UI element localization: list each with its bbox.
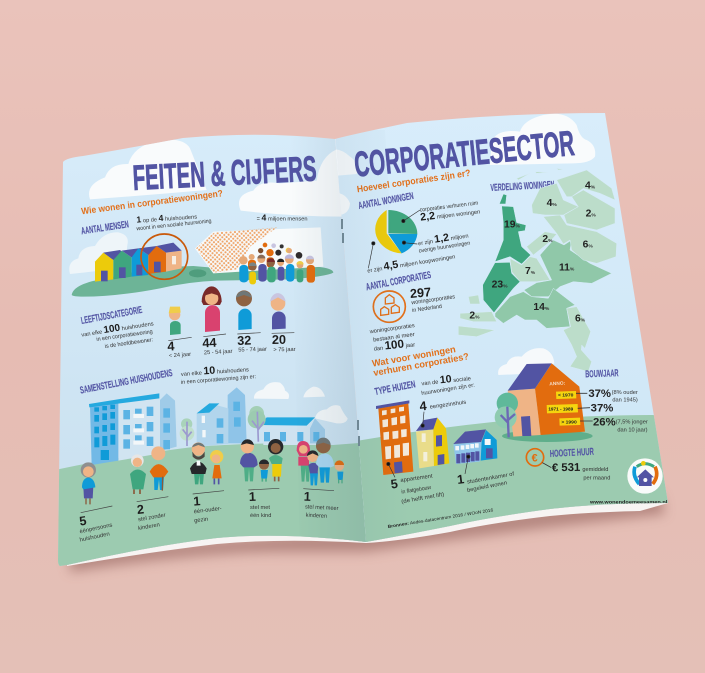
age stat: over 75: 20 (272, 333, 286, 347)
household: single parent: één-ouder- (194, 506, 222, 515)
icon: euro coin: € (532, 452, 538, 464)
household: couple one child: stel met (250, 505, 270, 511)
year: after 1990 (559, 416, 648, 433)
text: rent note: gemiddeld (582, 467, 608, 473)
cloud: top right (490, 114, 595, 165)
map labels: percentages: 7% (525, 266, 536, 277)
year: after 1990: > 1990 (561, 419, 577, 425)
household: couple more children: kinderen (306, 513, 327, 520)
cloud: behind houses (69, 232, 128, 274)
heading: hoogte huur: HOOGTE HUUR (550, 447, 594, 460)
text: 1,2 miljoen: er zijn 1,2 miljoen (417, 228, 469, 248)
figure: elderly man (150, 446, 168, 491)
household: single parent: 1 (193, 494, 201, 509)
household: couple (136, 497, 168, 532)
staples (341, 219, 360, 446)
age stat: over 75: > 75 jaar (273, 347, 296, 353)
text: 4 miljoen mensen: = 4 miljoen mensen (257, 212, 308, 222)
text: van elke 100: van elke 100 huishoudens (80, 317, 154, 340)
text: 4,5 miljoen: er zijn 4,5 miljoen koopwoningen (366, 249, 456, 276)
text: 2,2 miljoen: 2,2 miljoen woningen (420, 204, 481, 224)
household: couple: stel zonder (138, 513, 166, 523)
text: 1 op de 4: 1 op de 4 huishoudens (136, 210, 197, 225)
trees (180, 406, 266, 446)
household: couple: 2 (136, 502, 145, 517)
age stat: 55-74 (237, 333, 267, 354)
stat: 297: 297 (409, 285, 432, 301)
stat: 100 jaar: woningcorporaties (368, 323, 415, 335)
stat: 297: in Nederland (412, 304, 442, 314)
label: 1 studentenkamer (456, 471, 515, 494)
text: van de 10: van de 10 sociale (421, 371, 471, 388)
label: 5 appartement (390, 473, 445, 505)
household: couple more children: stel met meer (305, 504, 339, 512)
text: van elke 10: van elke 10 huishoudens (180, 362, 249, 379)
stat: 100 jaar: bestaan al meer (373, 332, 415, 344)
text: 2,2 miljoen (420, 201, 481, 224)
text: van de 10 (421, 371, 476, 397)
household: couple: kinderen (138, 522, 160, 532)
pie chart: woningen (375, 210, 417, 253)
text: rent note (582, 467, 610, 481)
leader lines (368, 210, 420, 268)
household: couple one child (248, 488, 279, 519)
figure: family (297, 438, 344, 485)
household: single parent: gezin (194, 517, 208, 524)
age stat: 25-54: 44 (202, 336, 217, 350)
map labels: percentages: 2% (586, 209, 596, 220)
icon: single family house (416, 418, 449, 468)
year: before 1970: (8% ouder (612, 390, 638, 396)
figure: middle-aged man (236, 290, 252, 330)
crowd of people (239, 243, 315, 284)
icon: euro coin (526, 449, 551, 468)
heading: aantal mensen: AANTAL MENSEN (80, 219, 130, 237)
brochure drop shadow (70, 494, 665, 572)
icon: logo (627, 458, 663, 494)
heading: hoeveel corporaties: Hoeveel corporaties zijn er? (356, 168, 471, 194)
heading: samenstelling huishoudens: SAMENSTELLING HUISHOUDENS (79, 368, 174, 397)
figure: elderly woman (130, 454, 146, 494)
figure: man and child (240, 439, 269, 482)
icon: big house: ANNO: (549, 380, 566, 386)
label: 4 eengezinshuis: eengezinshuis (429, 400, 467, 411)
text: 1,2 miljoen (417, 228, 471, 255)
figure: girl (210, 450, 223, 484)
year: 1971-1989: 37% (591, 402, 613, 414)
year: before 1970: 37% (588, 388, 611, 400)
text: 1,2 miljoen: overige huurwoningen (418, 241, 471, 255)
heading: aantal corporaties: AANTAL CORPORATIES (365, 270, 432, 293)
ground shadow big house (502, 430, 593, 442)
dot pattern (196, 227, 277, 273)
heading: type huizen: TYPE HUIZEN (374, 379, 416, 398)
year: after 1990: 26% (593, 416, 616, 428)
text: website: www.wonendoemeesamen.nl (589, 500, 667, 505)
household: single (78, 506, 113, 544)
household: couple more children (303, 489, 339, 520)
heading: wat voor woningen: Wat voor woningen (371, 344, 457, 369)
stat: 297 (409, 285, 456, 314)
cloud: spine top (327, 149, 357, 177)
heading: wie wonen: Wie wonen in corporatiewoningen? (81, 188, 224, 216)
age stat: under 24: < 24 jaar (169, 352, 191, 359)
text: in een corporatiewoning zijn er: in een corporatiewoning zijn er: (181, 374, 257, 386)
heading: wat voor woningen: verhuren corporaties? (373, 351, 470, 378)
map labels: percentages: 11% (559, 263, 575, 274)
figure: adult woman (202, 286, 222, 332)
heading: bouwjaar: BOUWJAAR (585, 368, 619, 380)
left page sky (58, 134, 366, 566)
title left: FEITEN & CIJFERS (132, 149, 317, 198)
household: single: éénpersoons (79, 522, 113, 535)
buildings right (260, 417, 325, 445)
cloud: top right of left page (239, 150, 342, 216)
arrow: white house shape (195, 227, 323, 273)
leaders for housing types (387, 412, 470, 477)
figure: elderly woman (270, 293, 286, 329)
buildings left (89, 393, 177, 465)
label: 5 appartement: appartement (400, 473, 433, 484)
household: single: huishouden (79, 531, 110, 544)
figure: woman (268, 439, 283, 481)
right page ground (345, 415, 680, 550)
mound under houses (72, 266, 333, 297)
year: after 1990: (7,5% jonger (616, 420, 648, 426)
text: leeftijdscategorie heading: LEEFTIJDSCATEGORIE (80, 305, 143, 327)
age stat: under 24: 4 (167, 339, 175, 354)
text: 2,2 miljoen: corporaties verhuren ruim (420, 201, 479, 214)
year: after 1990: dan 10 jaar) (617, 427, 648, 433)
icon: highlight circle (141, 234, 188, 279)
cloud behind big house (498, 348, 554, 375)
label: 1 studentenkamer: begeleid wonen (467, 480, 508, 494)
figure: bearded man (190, 442, 207, 484)
panel: left page (58, 134, 366, 566)
heading: verdeling woningen: VERDELING WONINGEN (490, 180, 555, 194)
household: single parent (193, 491, 224, 524)
map labels: percentages: 2% (469, 310, 480, 321)
cloud: spine lower (327, 192, 350, 215)
heading: aantal woningen: AANTAL WONINGEN (358, 191, 415, 212)
clouds (254, 382, 348, 423)
label: 5 appartement: 5 (390, 477, 399, 492)
panel: right page (327, 105, 680, 550)
label: 5 appartement: in flatgebouw (401, 485, 432, 496)
household: single: 5 (78, 514, 87, 529)
label: 1 studentenkamer: studentenkamer of (467, 471, 515, 486)
icon: student housing (453, 429, 497, 464)
right page sky (330, 105, 675, 550)
age stat: 25-54 (202, 334, 233, 356)
year: before 1970 (556, 388, 638, 403)
household: couple one child: 1 (249, 490, 256, 504)
map labels: percentages: 2% (542, 234, 553, 245)
household: couple one child: één kind (250, 513, 271, 519)
icon: row of houses (95, 243, 182, 282)
left spine shade (290, 130, 372, 560)
year: before 1970: dan 1945) (612, 397, 638, 403)
icon: houses in circle (373, 291, 405, 322)
text: woont in: woont in een sociale huurwoning (135, 218, 212, 232)
icon: big house (508, 363, 585, 437)
text: van de 10: huurwoningen zijn er: (421, 383, 476, 397)
figure: child (169, 307, 181, 335)
map labels: percentages: 14% (533, 302, 550, 313)
label: 5 appartement: (de helft met lift) (401, 492, 445, 505)
text: sources: Bronnen: Aedes-datacentrum 2016 / WOoN 2016 (387, 507, 494, 529)
text: leeftijd intro: in een corporatiewoning (96, 329, 153, 343)
map labels: percentages: 4% (585, 180, 596, 191)
figure: single woman (81, 462, 96, 504)
clouds: top of left page (89, 140, 207, 199)
stat: 297: woningcorporaties (410, 294, 456, 306)
label: 4 eengezinshuis: 4 (419, 399, 427, 414)
right spine shade (335, 130, 410, 550)
map labels: percentages: 4% (547, 198, 557, 209)
stat: rent: € 531 (552, 462, 580, 474)
year: before 1970: < 1970 (558, 393, 574, 399)
year: 1971-1989: 1971 - 1989 (548, 406, 574, 411)
map: netherlands (458, 168, 617, 372)
age stat: 25-54: 25 - 54 jaar (204, 349, 233, 356)
household: couple more children: 1 (304, 490, 311, 504)
map labels: percentages: 19% (504, 219, 520, 230)
buildings center (197, 387, 247, 447)
label: 1 studentenkamer: 1 (456, 472, 465, 487)
map labels: percentages: 6% (583, 239, 593, 250)
stat: 100 jaar (368, 323, 416, 354)
icon: tree (495, 393, 518, 437)
icon: apartment building (376, 400, 413, 475)
age stat: over 75 (272, 333, 296, 353)
age stat: 55-74: 32 (237, 334, 252, 348)
stat: 100 jaar: dan 100 jaar (373, 336, 416, 354)
year: 1971-1989 (547, 402, 613, 414)
age stat: 55-74: 55 - 74 jaar (238, 347, 267, 354)
map labels: percentages: 23% (492, 279, 508, 290)
left page ground (58, 443, 366, 566)
map labels: percentages: 6% (575, 314, 586, 325)
label: 4 eengezinshuis (419, 399, 467, 414)
text: leeftijd intro (96, 330, 153, 348)
dark spot (189, 269, 206, 277)
paper edge (67, 503, 668, 566)
text: leeftijd intro: is de hoofdbewoner: (104, 337, 154, 350)
map labels: percentages (469, 180, 596, 325)
age stat: under 24 (167, 337, 192, 359)
text: rent note: per maand (583, 475, 610, 481)
